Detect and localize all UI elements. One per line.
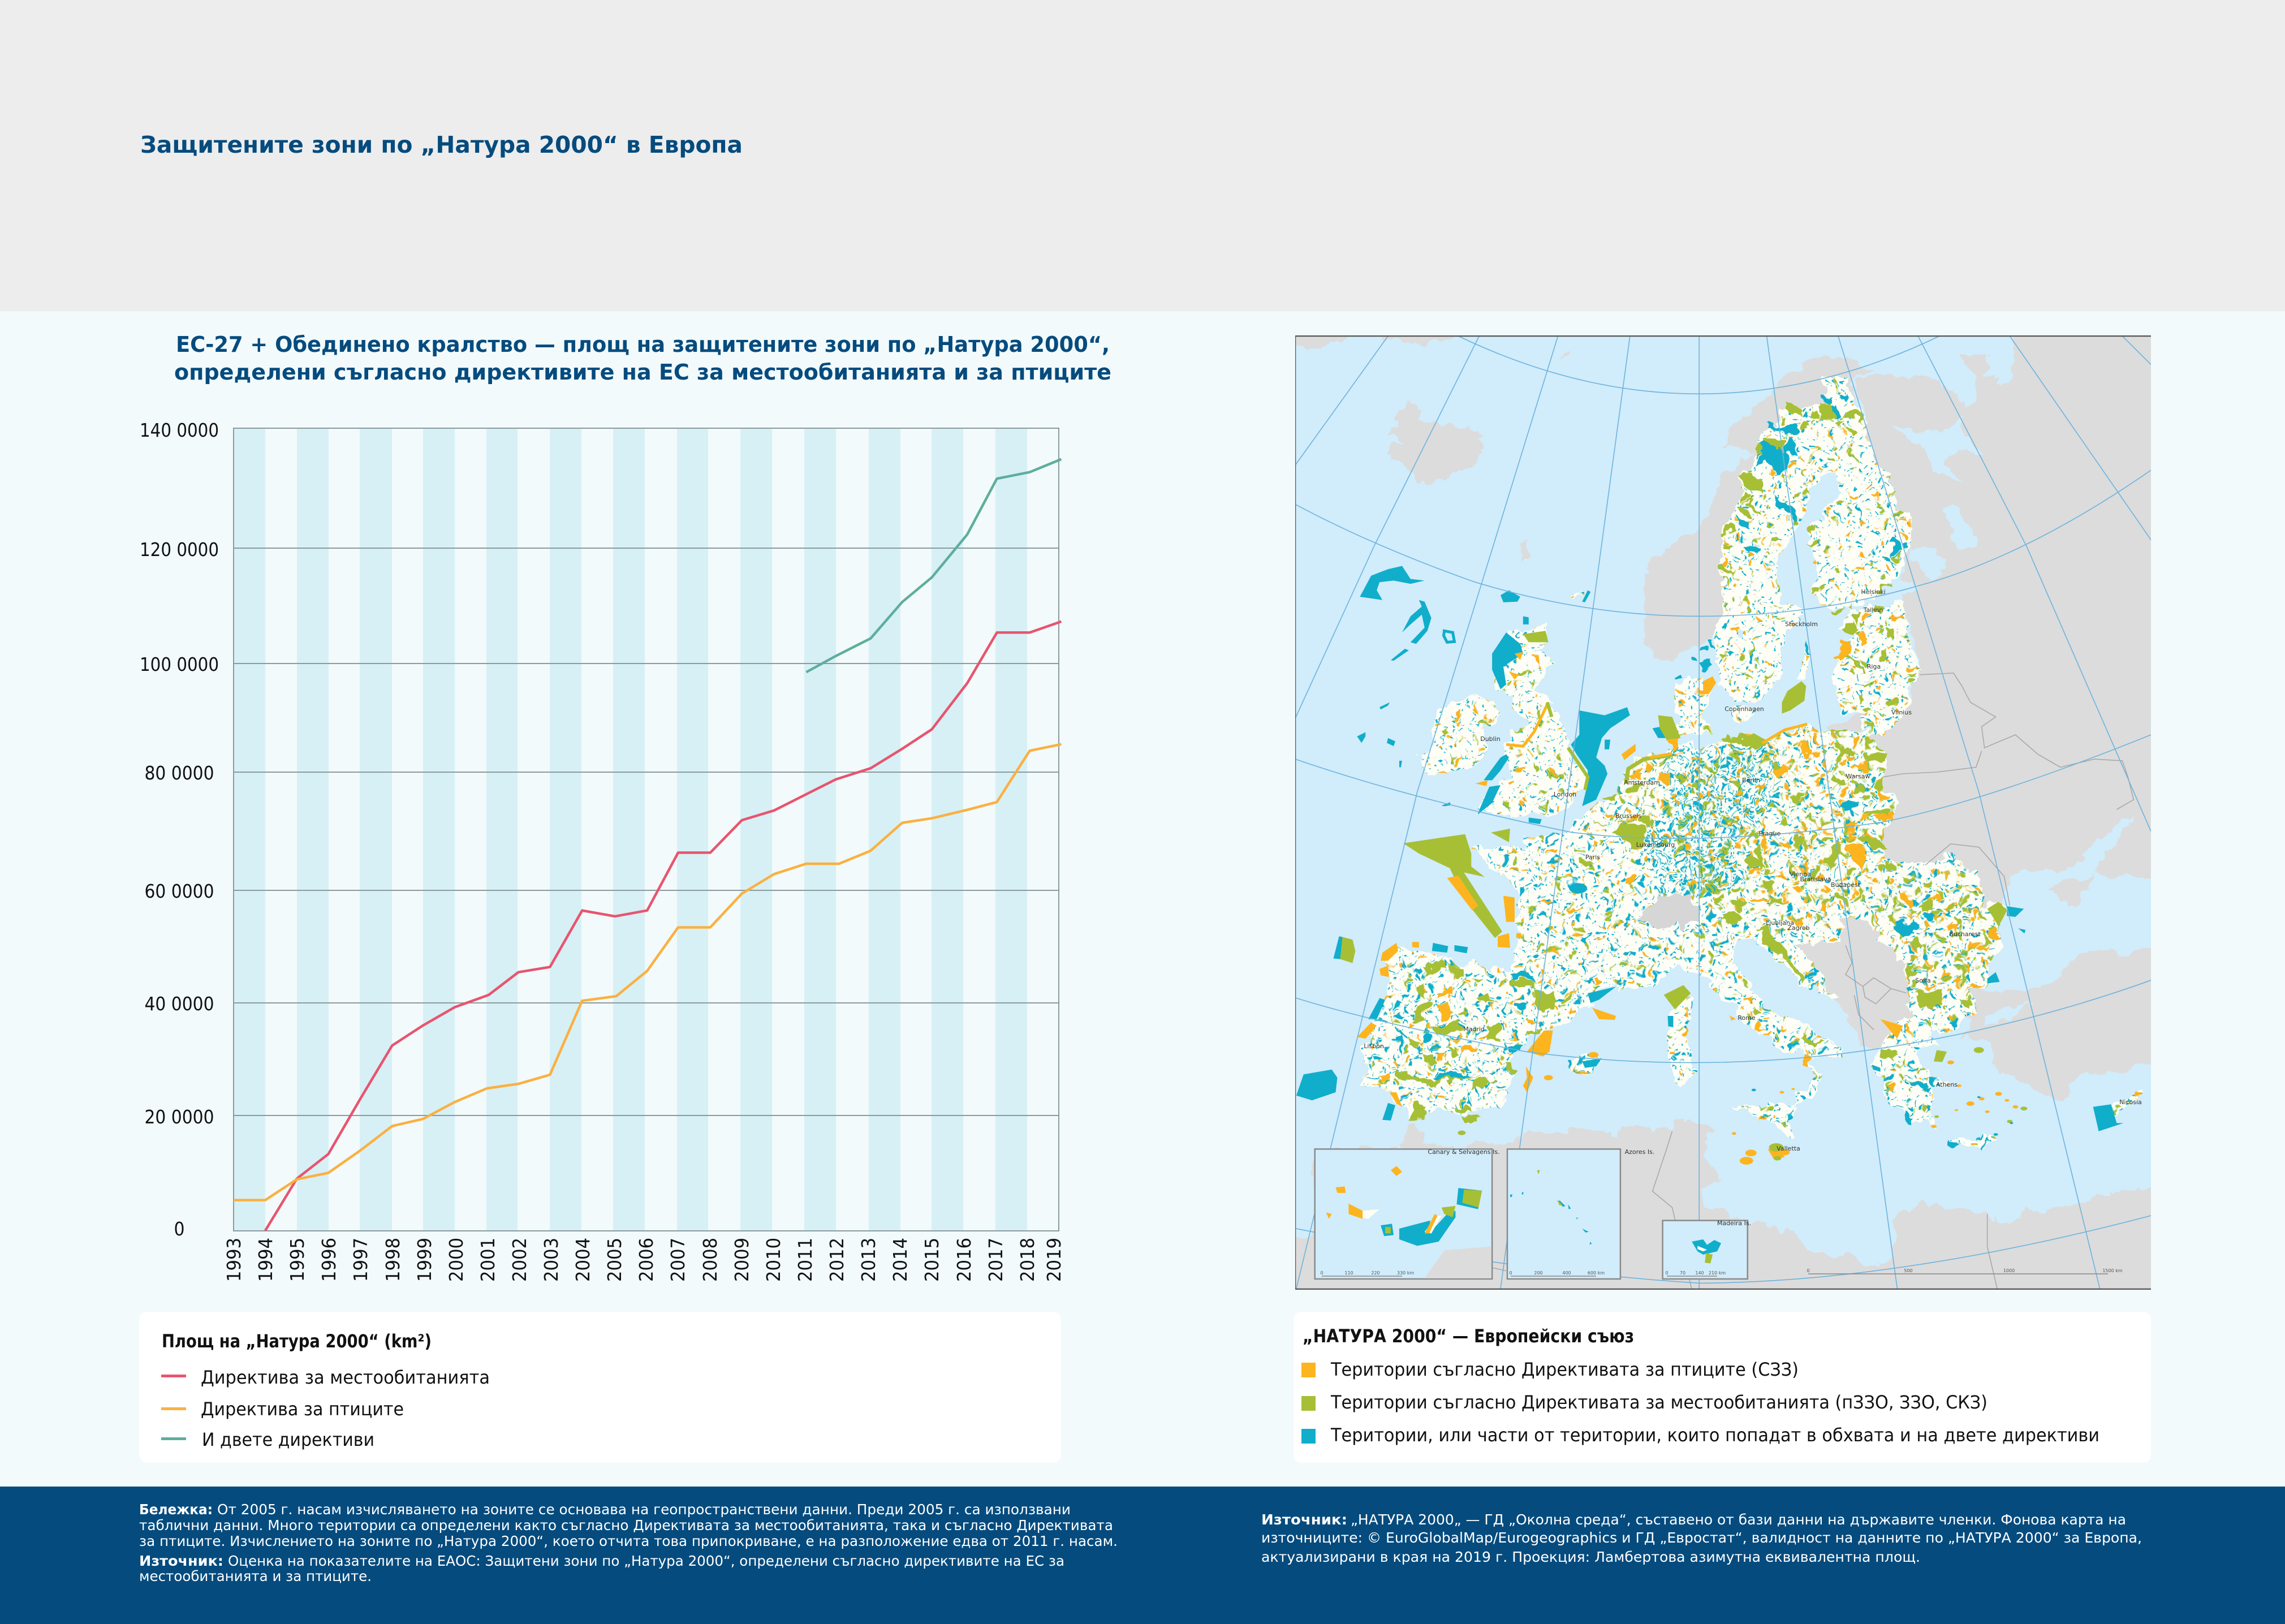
- legend: map: „НАТУРА 2000“ — Европейски съюз: [1303, 1325, 1634, 1347]
- x axis labels: 1996: [318, 1238, 340, 1282]
- Crimea: [2046, 878, 2094, 906]
- capital labels: Tallinn: [1863, 606, 1883, 614]
- central Europe sites: [1603, 735, 1917, 1067]
- Iberian green sites: [1393, 963, 1572, 1122]
- borders of non-EU countries: [1442, 673, 2133, 1290]
- map panel: [1295, 335, 2151, 1290]
- capital labels: Copenhagen: [1724, 705, 1764, 713]
- x axis labels: 2011: [794, 1238, 816, 1282]
- legend: map: [1294, 1312, 2151, 1463]
- capital labels: Madrid: [1463, 1026, 1485, 1033]
- y axis labels: 20 0000: [145, 1106, 214, 1128]
- capital labels: Dublin: [1480, 735, 1501, 743]
- scale bars: 220: [1371, 1270, 1380, 1276]
- capital labels: Valletta: [1777, 1145, 1800, 1152]
- footer note left: Оценка на показателите на ЕАОС: Защитени зони по „Натура 2000“, определени съгласно директивите на ЕС за: [228, 1553, 1064, 1569]
- x axis labels: 2002: [508, 1238, 531, 1282]
- scale bars: 70: [1680, 1270, 1685, 1276]
- x axis labels: 2017: [985, 1238, 1007, 1282]
- x axis labels: 2019: [1043, 1238, 1065, 1282]
- y axis labels: [140, 419, 219, 1240]
- capital labels: Vilnius: [1891, 709, 1912, 716]
- inset: Canary and Selvagens Islands: [1315, 1149, 1492, 1279]
- y axis labels: 40 0000: [145, 993, 214, 1015]
- x axis labels: 2010: [762, 1238, 784, 1282]
- lakes in Sweden: [1738, 628, 1744, 639]
- chart heading: ЕС-27 + Обединено кралство — площ на защитените зони по „Натура 2000“,: [176, 332, 1110, 357]
- Aegean islands: [1458, 1047, 2027, 1160]
- x axis labels: 2008: [699, 1238, 721, 1282]
- x axis labels: 2016: [953, 1238, 975, 1282]
- capital labels: London: [1554, 791, 1576, 798]
- footer note left: От 2005 г. насам изчисляването на зоните се основава на геопространствени данни. Преди 2005 г. са използвани: [217, 1501, 1071, 1518]
- teal sites north: [1357, 566, 1682, 824]
- scale bars: 140: [1695, 1270, 1704, 1276]
- non-EU land south-east and Africa: [1296, 825, 2151, 1289]
- line: birds directive: [234, 744, 1061, 1200]
- footer note left: таблични данни. Много територии са определени както съгласно Директивата за местообитанията, така и съгласно Директивата: [139, 1517, 1113, 1533]
- x axis labels: 2004: [572, 1238, 594, 1282]
- y axis labels: 80 0000: [145, 762, 214, 784]
- land layer with organic coast: [1296, 337, 2151, 1289]
- capital labels: Azores Is.: [1625, 1148, 1654, 1156]
- green sites south: [1340, 829, 2007, 1062]
- scale bars: 0: [1807, 1268, 1810, 1273]
- year stripes: [234, 428, 1027, 1231]
- title: Защитените зони по „Натура 2000“ в Европа: [140, 131, 743, 158]
- central teal sites: [1603, 804, 1917, 937]
- x axis labels: 2005: [603, 1238, 626, 1282]
- x axis labels: 1998: [382, 1238, 404, 1282]
- graticule: [1295, 336, 2151, 1289]
- line: both directives: [806, 459, 1061, 672]
- scale bars: 0: [1509, 1270, 1512, 1276]
- capital labels: Nicosia: [2119, 1099, 2142, 1106]
- grid lines: [234, 428, 1059, 1231]
- capital labels: Zagreb: [1787, 924, 1810, 932]
- coast strips: [1626, 755, 1672, 783]
- x axis labels: 2012: [826, 1238, 848, 1282]
- capital labels: Bucharest: [1949, 931, 1981, 938]
- scale bars: 200: [1534, 1270, 1543, 1276]
- footer note left: Бележка:: [139, 1501, 213, 1518]
- x axis labels: 2014: [889, 1238, 911, 1282]
- x axis labels: 1999: [413, 1238, 436, 1282]
- y axis labels: 120 0000: [140, 539, 219, 561]
- x axis labels: 2001: [477, 1238, 499, 1282]
- capital labels: Stockholm: [1785, 621, 1818, 628]
- chart heading: [174, 332, 1111, 385]
- x axis labels: 2003: [540, 1238, 562, 1282]
- capital labels: Vienna: [1790, 871, 1811, 878]
- footer band: [0, 1487, 2285, 1624]
- x axis labels: 2015: [921, 1238, 943, 1282]
- x axis labels: 2013: [857, 1238, 879, 1282]
- map frame: [1295, 336, 2151, 1289]
- y axis labels: 140 0000: [140, 419, 219, 441]
- scale bars: 330 km: [1397, 1270, 1414, 1276]
- legend item: birds: Директива за птиците: [201, 1398, 404, 1420]
- scale bars: 500: [1904, 1268, 1913, 1273]
- capital labels: Lisbon: [1364, 1043, 1384, 1050]
- Switzerland: [1640, 893, 1698, 930]
- northern sites: [1357, 566, 1807, 824]
- non-EU land north: [1278, 326, 2179, 842]
- legend: chart: [139, 1312, 1061, 1463]
- capital labels: Helsinki: [1861, 588, 1886, 596]
- inset: Azores: [1507, 1149, 1620, 1279]
- footer note left: за птиците. Изчислението на зоните по „Натура 2000“, което отчита това припокриване, е на разположение едва от 2011 г. насам.: [139, 1533, 1118, 1549]
- orange sites north: [1475, 652, 1716, 786]
- capital labels: Rome: [1738, 1014, 1756, 1022]
- Nordic sites: [1697, 396, 1917, 677]
- x axis labels: 1995: [286, 1238, 308, 1282]
- capital labels: Ljubljana: [1766, 919, 1794, 927]
- Iberian sites: [1374, 963, 1580, 1122]
- central orange sites: [1628, 735, 1872, 1067]
- teal sites south: [1296, 883, 2123, 1131]
- protected site speckle: [1361, 376, 2142, 1151]
- capital labels: Paris: [1585, 854, 1600, 861]
- scale bars: 400: [1562, 1270, 1571, 1276]
- line series: [234, 459, 1061, 1231]
- south land sites: [1801, 901, 1973, 1148]
- capital labels: Budapest: [1831, 881, 1861, 889]
- x axis labels: 2007: [667, 1238, 689, 1282]
- Nordic orange sites: [1833, 635, 1869, 661]
- footer note left: [139, 1501, 1118, 1584]
- x axis labels: 1997: [350, 1238, 372, 1282]
- EU land: [1360, 376, 2142, 1148]
- y axis labels: 0: [174, 1218, 184, 1240]
- x axis labels: 2006: [635, 1238, 657, 1282]
- capital labels: Warsaw: [1846, 773, 1870, 780]
- orange sites south: [1357, 876, 1903, 1165]
- header band: [0, 0, 2285, 311]
- footer note left: Източник:: [139, 1553, 223, 1569]
- capital labels: Prague: [1759, 830, 1780, 837]
- legend item: birds sites: Територии съгласно Директивата за птиците (СЗЗ): [1330, 1359, 1799, 1380]
- scale bars: 1000: [2003, 1268, 2015, 1273]
- scale bars: 1500 km: [2102, 1268, 2123, 1273]
- capital labels: Madeira Is.: [1717, 1220, 1751, 1227]
- footer source right: „НАТУРА 2000„ — ГД „Околна среда“, съставено от бази данни на държавите членки. Фонова карта на: [1351, 1511, 2126, 1528]
- legend item: both directives sites: Територии, или части от територии, които попадат в обхвата и на двете директиви: [1330, 1424, 2099, 1446]
- Latvian green coast: [1846, 654, 1864, 672]
- ring site: [1444, 631, 1454, 642]
- inset: Madeira: [1663, 1221, 1748, 1279]
- green sites north: [1523, 631, 1806, 746]
- chart heading: определени съгласно директивите на ЕС за местообитанията и за птиците: [174, 360, 1111, 385]
- Nordic teal sites: [1697, 396, 1908, 669]
- legend item: both: И двете директиви: [202, 1429, 374, 1450]
- legend item: habitats: Директива за местообитанията: [201, 1367, 490, 1388]
- y axis labels: 100 0000: [140, 653, 219, 675]
- capital labels: Athens: [1936, 1081, 1958, 1088]
- capital labels: [1364, 588, 2142, 1227]
- footer source right: [1261, 1511, 2142, 1565]
- footer source right: Източник:: [1261, 1511, 1347, 1528]
- legend: chart: Площ на „Натура 2000“ (km²): [162, 1330, 432, 1352]
- legend item: habitats sites: Територии съгласно Директивата за местообитанията (пЗЗО, ЗЗО, СКЗ): [1330, 1392, 1987, 1413]
- capital labels: Luxembourg: [1636, 841, 1675, 848]
- scale bars: 210 km: [1709, 1270, 1726, 1276]
- capital labels: Bratislava: [1800, 876, 1831, 883]
- y axis labels: 60 0000: [145, 880, 214, 902]
- capital labels: Canary & Selvagens Is.: [1428, 1148, 1500, 1156]
- scale bars: 0: [1320, 1270, 1323, 1276]
- x axis labels: 1994: [255, 1238, 277, 1282]
- x axis labels: 1993: [223, 1238, 245, 1282]
- marine sites south: [1296, 829, 2123, 1165]
- scale bars: 0: [1665, 1270, 1669, 1276]
- x axis labels: [223, 1238, 1065, 1282]
- chart panel: [140, 332, 1111, 1282]
- inland seas and lakes: [1889, 416, 2179, 1026]
- scale bars: 600 km: [1588, 1270, 1605, 1276]
- Nordic green sites: [1721, 402, 1917, 677]
- capital labels: Riga: [1867, 663, 1881, 670]
- sea: [1295, 335, 2151, 1290]
- x axis labels: 2000: [445, 1238, 467, 1282]
- line: habitats directive: [265, 622, 1061, 1231]
- capital labels: Amsterdam: [1624, 779, 1660, 786]
- capital labels: Sofia: [1915, 977, 1931, 984]
- capital labels: Berlin: [1742, 777, 1760, 784]
- Iberian orange sites: [1378, 986, 1580, 1080]
- central green sites: [1605, 735, 1913, 1044]
- scale bars: 110: [1344, 1270, 1353, 1276]
- scale bars: [1320, 1268, 2123, 1276]
- Iberian teal sites: [1374, 967, 1534, 1105]
- footer source right: актуализирани в края на 2019 г. Проекция: Ламбертова азимутна еквивалентна площ.: [1261, 1549, 1920, 1565]
- x axis labels: 2018: [1016, 1238, 1038, 1282]
- x axis labels: 2009: [731, 1238, 753, 1282]
- footer source right: източниците: © EuroGlobalMap/Eurogeographics и ГД „Евростат“, валидност на данните по „НАТУРА 2000“ за Европа,: [1261, 1530, 2142, 1546]
- footer note left: местообитанията и за птиците.: [139, 1568, 372, 1584]
- capital labels: Brussels: [1615, 812, 1641, 820]
